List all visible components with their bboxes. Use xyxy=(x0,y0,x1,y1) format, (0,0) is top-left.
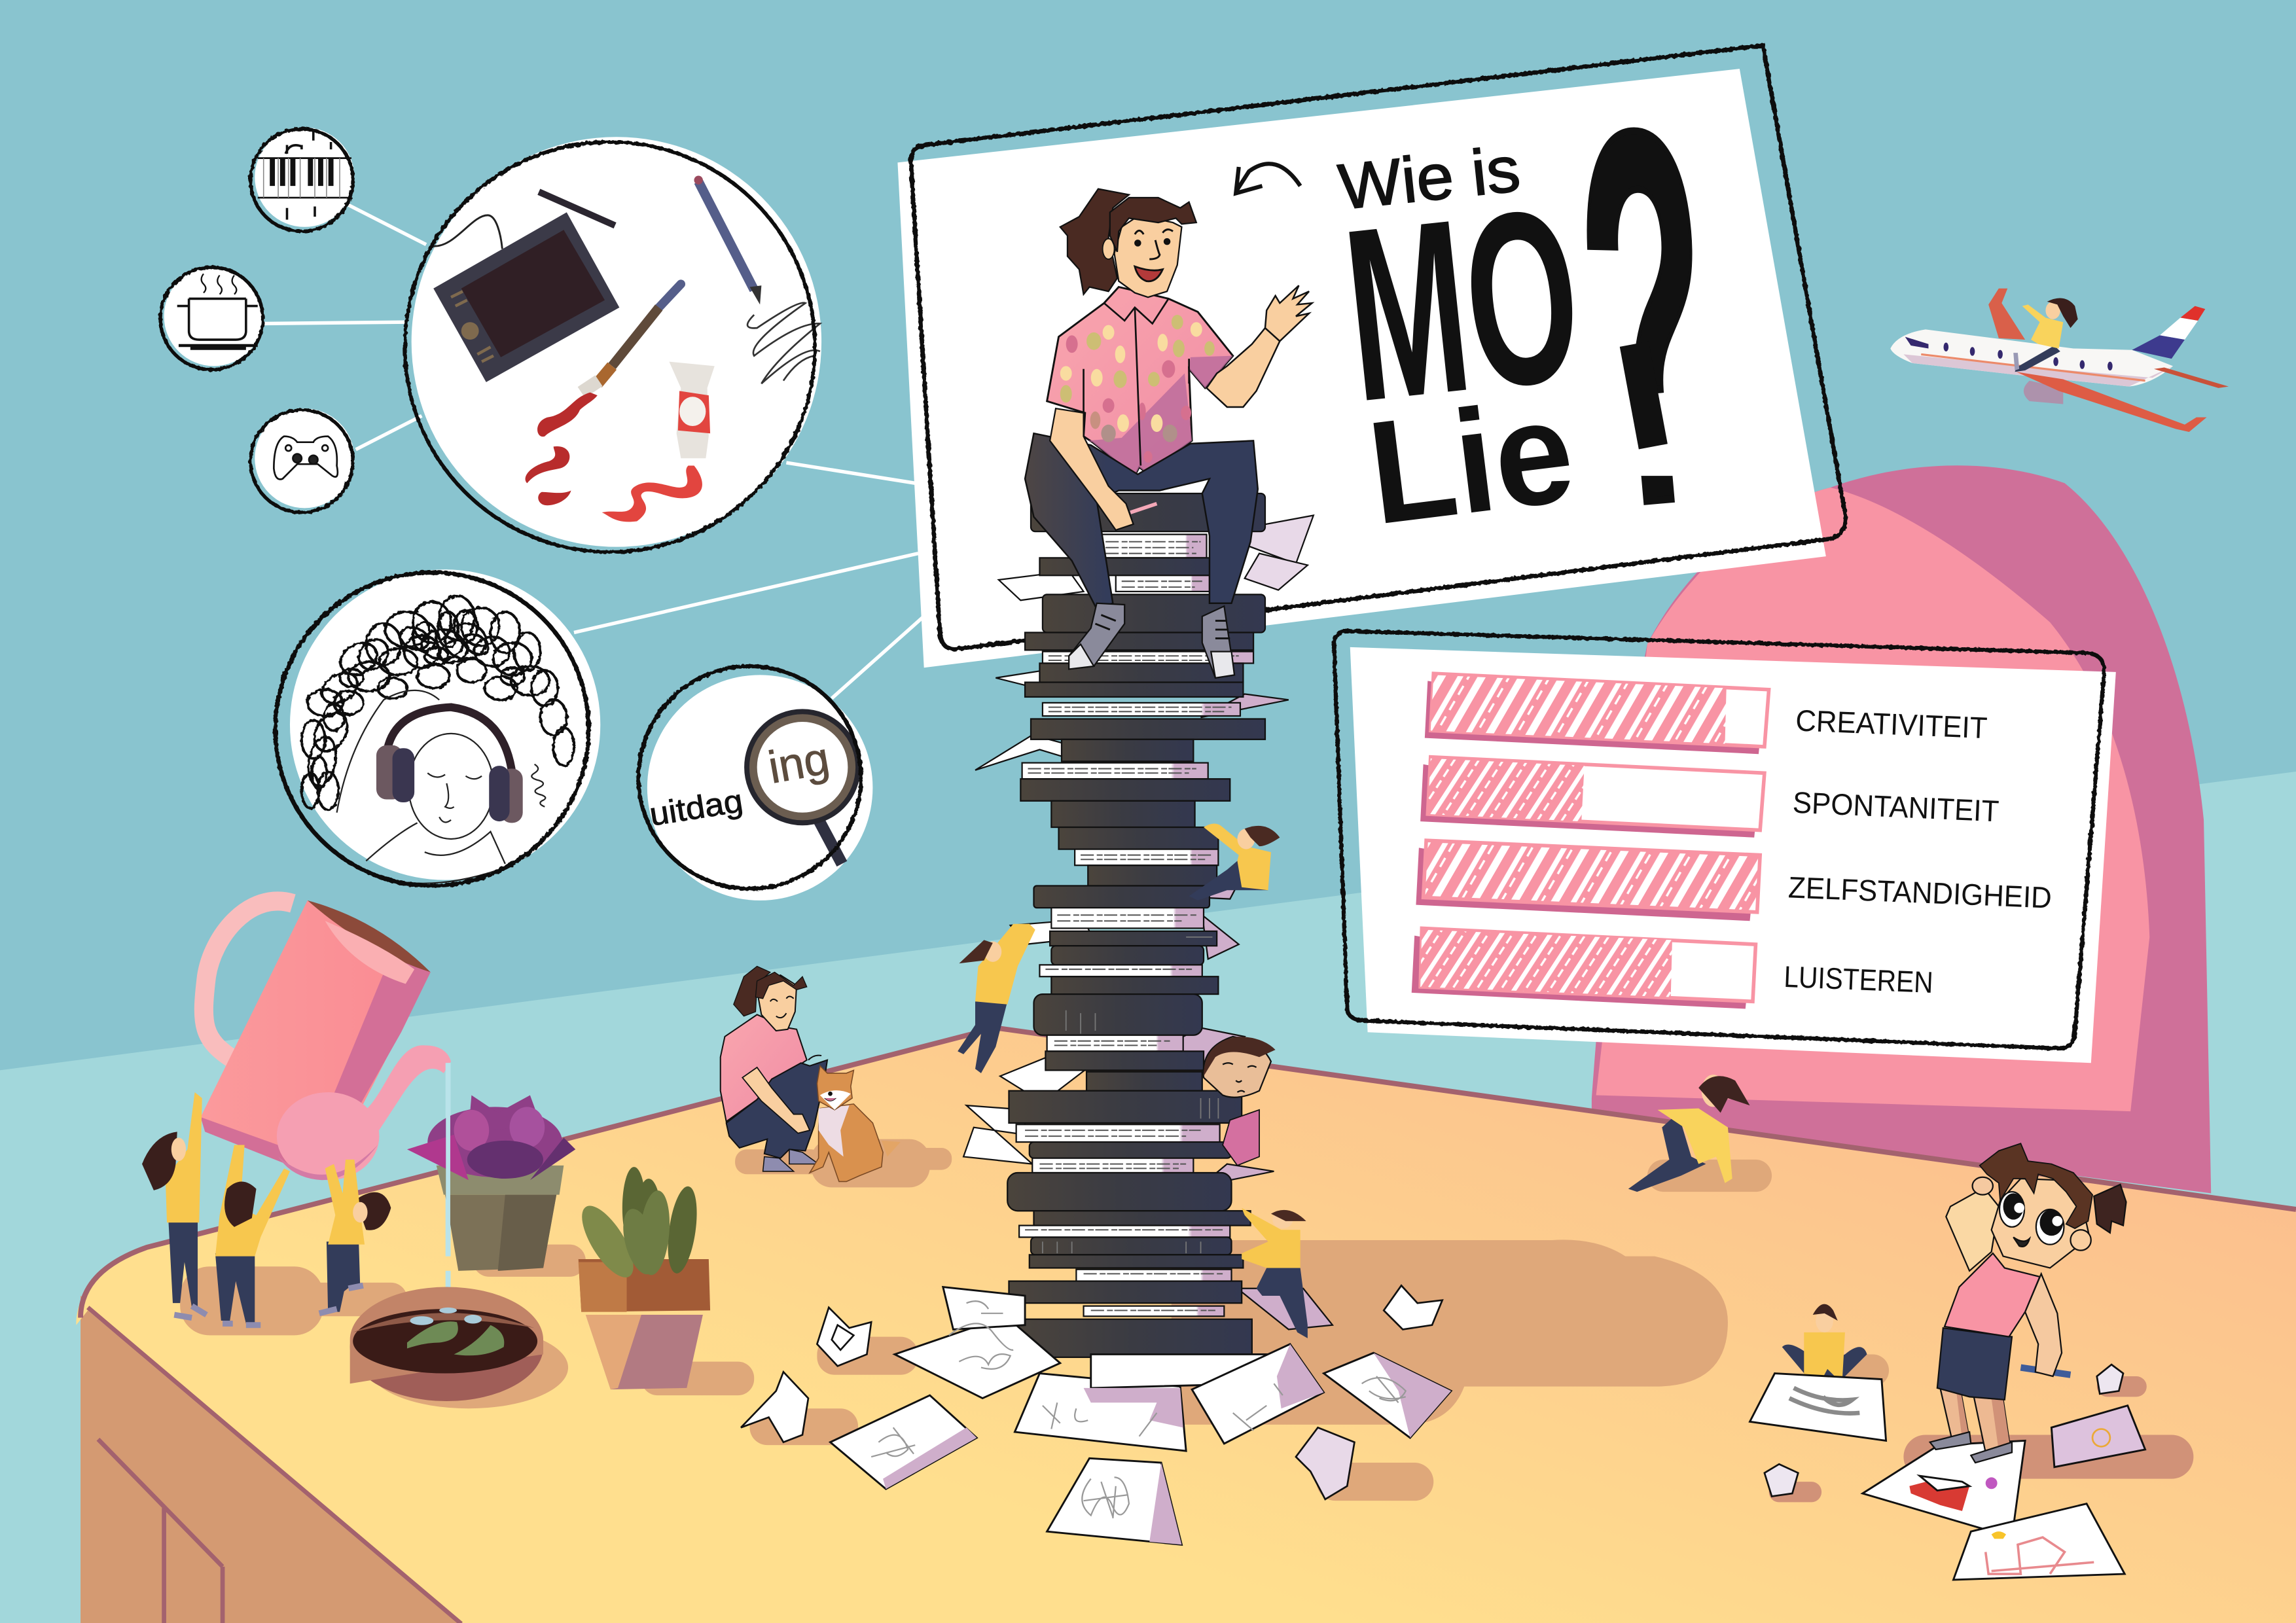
red brush strokes xyxy=(526,393,598,505)
pencil xyxy=(694,175,761,304)
pencil sketches on paper xyxy=(871,1301,1406,1518)
title: MO: MO xyxy=(1335,156,1592,454)
skill bar: luisteren xyxy=(1412,928,1934,1008)
sneakers xyxy=(1069,603,1234,678)
shorts xyxy=(1937,1328,2012,1400)
eyes and mouth xyxy=(2000,1192,2064,1247)
word: uitdag: uitdag xyxy=(647,783,745,833)
piano keys xyxy=(258,132,351,220)
tail flag xyxy=(2132,306,2205,359)
watering can xyxy=(201,901,451,1310)
engine xyxy=(2024,381,2063,404)
drawing tablet xyxy=(432,192,619,382)
sitting figure by the arch xyxy=(1628,1075,1750,1192)
airplane xyxy=(1890,289,2229,432)
label: CREATIVITEIT xyxy=(1795,703,1988,745)
shirt shading xyxy=(1088,356,1233,476)
controller icon xyxy=(274,437,338,479)
passenger xyxy=(2013,298,2078,372)
head xyxy=(1992,1179,2090,1268)
label: ZELFSTANDIGHEID xyxy=(1787,870,2053,915)
pencil scribble xyxy=(747,303,820,383)
succulent: purple plant xyxy=(407,1063,575,1271)
circle: uitdaging magnifier xyxy=(638,666,872,901)
pink top xyxy=(1945,1253,2039,1337)
book spine lines xyxy=(1043,937,1218,1253)
fuselage xyxy=(1890,329,2173,387)
face details xyxy=(1135,230,1173,281)
pink pencil xyxy=(1130,504,1157,512)
water stream xyxy=(447,1063,449,1310)
collar and placket xyxy=(1084,298,1189,465)
arrow xyxy=(1236,164,1300,193)
raised arm xyxy=(1946,1192,1999,1271)
upper wing xyxy=(1988,289,2025,340)
can base xyxy=(277,1092,379,1180)
pink arch xyxy=(1592,465,2211,1193)
circle: headphones and scribbles xyxy=(276,569,600,886)
shadows on table xyxy=(180,1139,2193,1502)
sleeping head with headphones xyxy=(337,690,545,883)
circle: game controller xyxy=(251,408,354,512)
connector lines xyxy=(264,205,925,698)
legs xyxy=(1940,1388,2011,1452)
helper 1 xyxy=(142,1092,206,1318)
crumpled papers xyxy=(741,1285,2123,1499)
circle: piano xyxy=(251,128,354,231)
skill bar: creativiteit xyxy=(1425,673,1988,754)
circle: art tools xyxy=(405,137,821,552)
paint tube xyxy=(669,362,715,458)
ponytail xyxy=(1060,189,1129,294)
shirt xyxy=(1047,287,1233,476)
thought scribbles xyxy=(302,596,574,810)
tailplane xyxy=(2154,368,2229,388)
hair xyxy=(1980,1143,2092,1228)
stack of books xyxy=(963,493,1333,1357)
lilac paper shading xyxy=(883,1344,1451,1544)
skills panel xyxy=(1334,631,2116,1063)
face xyxy=(1115,215,1181,297)
shirt print xyxy=(1060,315,1215,463)
shoes xyxy=(1930,1432,2012,1463)
loose sheets behind stack xyxy=(963,516,1333,1329)
cross-legged figure drawing xyxy=(1782,1304,1867,1391)
cockpit and windows xyxy=(1905,337,2145,381)
helpers lifting the can xyxy=(142,1092,391,1325)
shiba dog xyxy=(810,1066,901,1181)
bowl with sprouting seeds xyxy=(350,1287,543,1401)
circle: cooking pot xyxy=(160,266,264,370)
skill bar: spontaniteit xyxy=(1420,757,2000,838)
title: Lie: Lie xyxy=(1360,368,1582,556)
succulent: green plant xyxy=(572,1167,710,1389)
red paint squiggle xyxy=(602,465,702,522)
climber: top right xyxy=(1189,823,1280,901)
label: LUISTEREN xyxy=(1784,959,1934,999)
girl xyxy=(1930,1143,2126,1463)
helper 3 xyxy=(319,1160,391,1313)
can body xyxy=(201,901,431,1176)
hair fringe xyxy=(1110,198,1196,252)
seeds xyxy=(407,1321,504,1355)
pot icon xyxy=(177,274,258,348)
table xyxy=(76,1028,2296,1623)
page lines xyxy=(1025,542,1239,1310)
green leaves xyxy=(572,1167,702,1285)
resting arm xyxy=(1050,408,1134,530)
sheets of paper on table xyxy=(831,1287,1451,1544)
title panel xyxy=(897,16,1846,668)
can handle xyxy=(204,901,293,1060)
title: Wie is: Wie is xyxy=(1335,132,1523,223)
raised arm and hand xyxy=(1206,285,1312,407)
skill bar: zelfstandigheid xyxy=(1416,840,2053,921)
purple leaves xyxy=(407,1095,575,1180)
label: SPONTANITEIT xyxy=(1792,785,2000,828)
helper 2 xyxy=(215,1145,290,1325)
magnifying glass xyxy=(747,711,858,864)
main character on books xyxy=(1025,189,1312,678)
climber: bottom right xyxy=(1242,1208,1308,1338)
paint brush xyxy=(581,284,681,393)
near wing xyxy=(2017,372,2207,432)
word: ing: ing xyxy=(764,732,833,793)
crouching person xyxy=(721,967,827,1171)
papers around the girl xyxy=(1750,1374,2145,1580)
hand in hair xyxy=(1973,1177,1993,1195)
title: question mark: ? xyxy=(1560,16,1734,617)
climber: left xyxy=(958,924,1035,1073)
can spout xyxy=(351,1045,451,1164)
trousers xyxy=(1025,433,1258,609)
character crouching with dog xyxy=(721,967,901,1181)
lowered arm and crayon xyxy=(2020,1274,2070,1376)
peeking child xyxy=(1204,1037,1276,1166)
